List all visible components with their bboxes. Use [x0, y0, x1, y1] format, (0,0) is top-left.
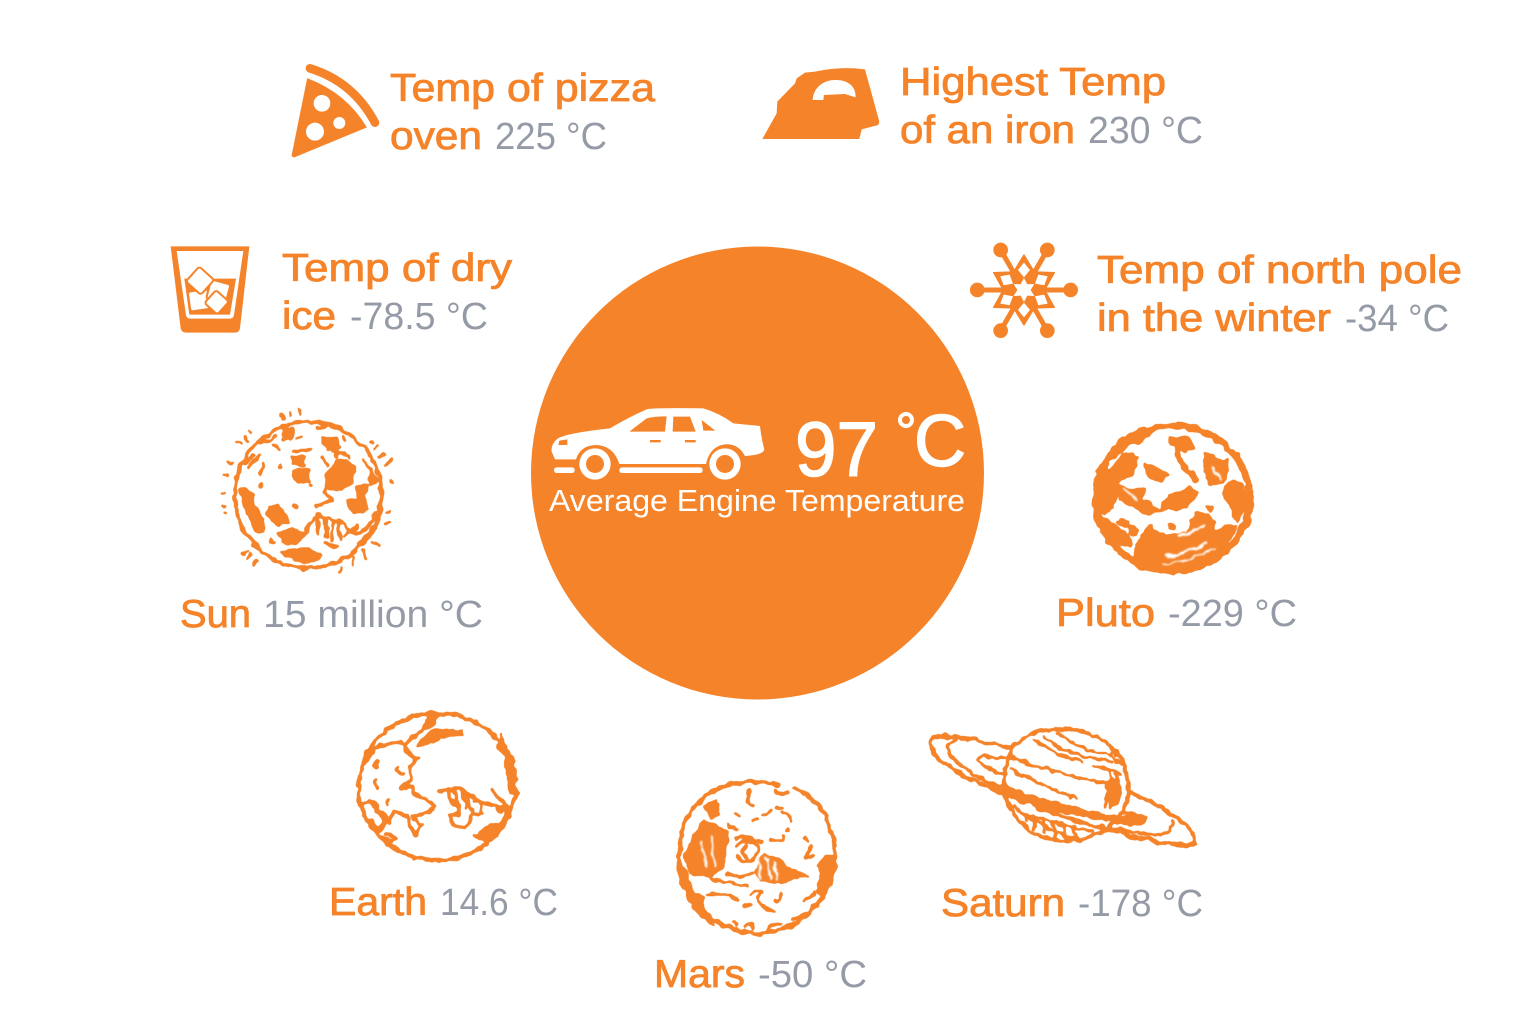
label: iron [900, 61, 1203, 152]
icon: car [552, 408, 764, 480]
label: pizza oven [390, 67, 655, 158]
label: earth [329, 881, 558, 924]
value: 97 degrees C: 97 [795, 407, 878, 493]
label: saturn: -178 °C [1078, 883, 1203, 925]
label: iron: 230 °C [1088, 110, 1203, 152]
label: sun: 15 million °C [263, 594, 483, 636]
label: pluto: -229 °C [1168, 593, 1297, 635]
label: sun: Sun [180, 593, 251, 636]
icon: iron [762, 68, 879, 139]
icon: pluto sketch [1095, 426, 1250, 572]
label: dry ice: Temp of dry [282, 247, 513, 290]
label: saturn: Saturn [941, 882, 1065, 925]
label: earth: Earth [329, 881, 427, 924]
icon: snowflake [970, 243, 1078, 338]
label: pluto: Pluto [1056, 592, 1155, 635]
icon: pizza slice [292, 68, 375, 157]
icon: glass with ice [171, 246, 249, 333]
value: 97 degrees C: C [914, 401, 966, 482]
label: north pole: in the winter [1097, 297, 1331, 340]
label: earth: 14.6 °C [440, 882, 558, 924]
label: sun [180, 593, 483, 636]
label: dry ice [282, 247, 513, 338]
label: dry ice: -78.5 °C [350, 296, 488, 338]
label: iron: Highest Temp [900, 61, 1166, 104]
icon: earth sketch [358, 713, 518, 860]
label: north pole: Temp of north pole [1097, 249, 1462, 292]
label: mars [654, 953, 867, 996]
central circle: average engine temperature [531, 246, 984, 700]
icon: mars sketch [677, 782, 835, 933]
label: pizza oven: 225 °C [495, 116, 607, 158]
caption: average engine temperature: Average Engine Temperature [549, 483, 965, 518]
icon: sun sketch [223, 409, 393, 572]
label: dry ice: ice [282, 295, 336, 338]
label: mars: Mars [654, 953, 745, 996]
label: pizza oven: oven [390, 115, 482, 158]
label: north pole: -34 °C [1345, 298, 1449, 340]
label: iron: of an iron [900, 109, 1075, 152]
label: pizza oven: Temp of pizza [390, 67, 655, 110]
label: saturn [941, 882, 1203, 925]
label: pluto [1056, 592, 1297, 635]
icon: saturn sketch [931, 729, 1195, 845]
value: 97 degrees C [795, 401, 966, 493]
label: mars: -50 °C [758, 954, 867, 996]
label: north pole [1097, 249, 1462, 340]
